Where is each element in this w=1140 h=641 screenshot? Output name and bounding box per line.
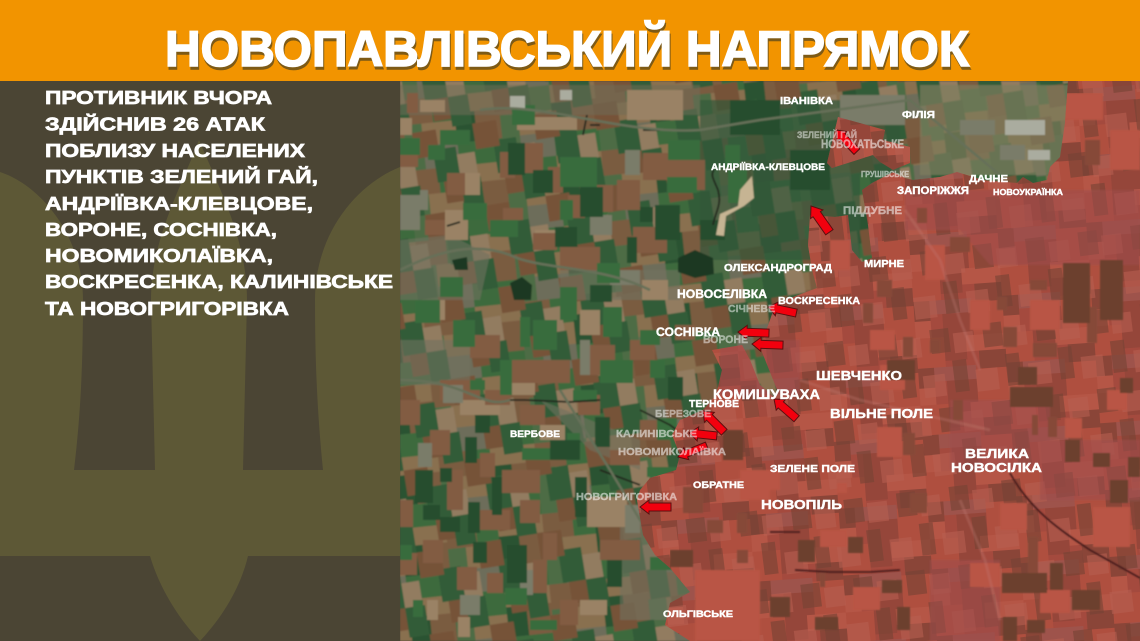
settlement labels: ФІЛІЯ <box>902 109 935 121</box>
tan fields <box>400 90 683 637</box>
title: НОВОПАВЛІВСЬКИЙ НАПРЯМОК <box>165 20 969 77</box>
satellite imagery <box>400 81 1140 641</box>
settlement labels: ОЛЕКСАНДРОГРАД <box>724 263 832 274</box>
settlement labels: ЗЕЛЕНИЙ ГАЙ <box>797 129 857 140</box>
occupied red zone <box>637 81 1140 641</box>
light bare patches <box>716 176 754 236</box>
arrow: Зелений Гай <box>836 129 860 155</box>
settlement labels: СОСНІВКА <box>656 325 720 339</box>
settlement labels: НОВОХАТЬСЬКЕ <box>821 137 904 151</box>
settlement labels: ГРУШІВСЬКЕ <box>861 169 909 179</box>
arrow: Новогригорівка <box>640 500 671 514</box>
settlement labels: МИРНЕ <box>864 259 904 270</box>
body text: ВОСКРЕСЕНКА, КАЛИНІВСЬКЕ <box>45 272 393 292</box>
settlement labels: ШЕВЧЕНКО <box>816 368 902 383</box>
header band <box>0 0 1140 81</box>
settlement labels: АНДРІЇВКА-КЛЕВЦОВЕ <box>711 162 825 173</box>
settlement labels: НОВОСІЛКА <box>951 460 1043 475</box>
body text: НОВОМИКОЛАЇВКА, <box>45 246 273 266</box>
settlement labels: ЗАПОРІЖЖЯ <box>897 185 969 197</box>
arrow: Новомиколаївка <box>677 442 709 460</box>
body text: ЗДІЙСНИВ 26 АТАК <box>45 114 266 134</box>
left panel <box>0 81 400 641</box>
body text: ПУНКТІВ ЗЕЛЕНИЙ ГАЙ, <box>45 166 318 187</box>
settlement labels: КОМИШУВАХА <box>713 387 820 402</box>
settlement labels: КАЛИНІВСЬКЕ <box>616 428 697 440</box>
grey fields <box>400 95 1025 615</box>
body text <box>45 88 393 319</box>
settlement labels: ВОРОНЕ <box>703 334 748 346</box>
settlement labels: ТЕРНОВЕ <box>689 398 739 410</box>
settlement labels: НОВОСЕЛІВКА <box>677 287 767 301</box>
dark green fields and forests <box>415 100 830 587</box>
arrow: Піддубне <box>810 205 834 236</box>
settlement labels: ДАЧНЕ <box>969 173 1008 185</box>
satellite map <box>400 81 1140 641</box>
settlement labels: НОВОУКРАЇНКА <box>993 187 1063 197</box>
attack arrows <box>640 125 862 514</box>
arrow: Вороне <box>752 337 783 352</box>
settlement labels: ЗЕЛЕНЕ ПОЛЕ <box>770 463 855 475</box>
arrow: Тернове <box>702 410 728 436</box>
mid green fields <box>400 105 747 630</box>
arrow: Воскресенка <box>767 302 798 318</box>
settlement labels: ВОСКРЕСЕНКА <box>778 296 860 307</box>
body text: ПРОТИВНИК ВЧОРА <box>45 88 272 108</box>
settlement labels: ПІДДУБНЕ <box>843 205 902 217</box>
trident emblem <box>0 140 400 641</box>
body text: ТА НОВОГРИГОРІВКА <box>45 299 289 319</box>
settlement labels: ВЕЛИКА <box>965 446 1030 461</box>
settlement labels: ІВАНІВКА <box>780 96 833 107</box>
settlement labels: НОВОПІЛЬ <box>761 497 842 512</box>
body text: ПОБЛИЗУ НАСЕЛЕНИХ <box>45 141 305 161</box>
arrow: Калинівське <box>688 426 718 443</box>
body text: ВОРОНЕ, СОСНІВКА, <box>45 220 277 240</box>
brown fields <box>400 92 706 625</box>
arrow: Комишуваха <box>774 398 800 422</box>
settlement labels: ВЕРБОВЕ <box>510 429 560 440</box>
settlement labels: НОВОГРИГОРІВКА <box>576 492 677 503</box>
forest blobs <box>452 250 714 300</box>
settlement labels <box>510 96 1063 620</box>
body text: АНДРІЇВКА-КЛЕВЦОВЕ, <box>45 194 313 214</box>
settlement labels: СІЧНЕВЕ <box>728 303 775 315</box>
dark waterways <box>447 115 719 485</box>
settlement labels: ОЛЬГІВСЬКЕ <box>663 609 733 620</box>
settlement labels: БЕРЕЗОВЕ <box>655 408 711 420</box>
settlement labels: ВІЛЬНЕ ПОЛЕ <box>830 406 933 421</box>
settlement labels: ОБРАТНЕ <box>693 480 744 491</box>
settlement labels: НОВОМИКОЛАЇВКА <box>618 445 726 458</box>
arrow: Соснівка <box>738 325 769 340</box>
